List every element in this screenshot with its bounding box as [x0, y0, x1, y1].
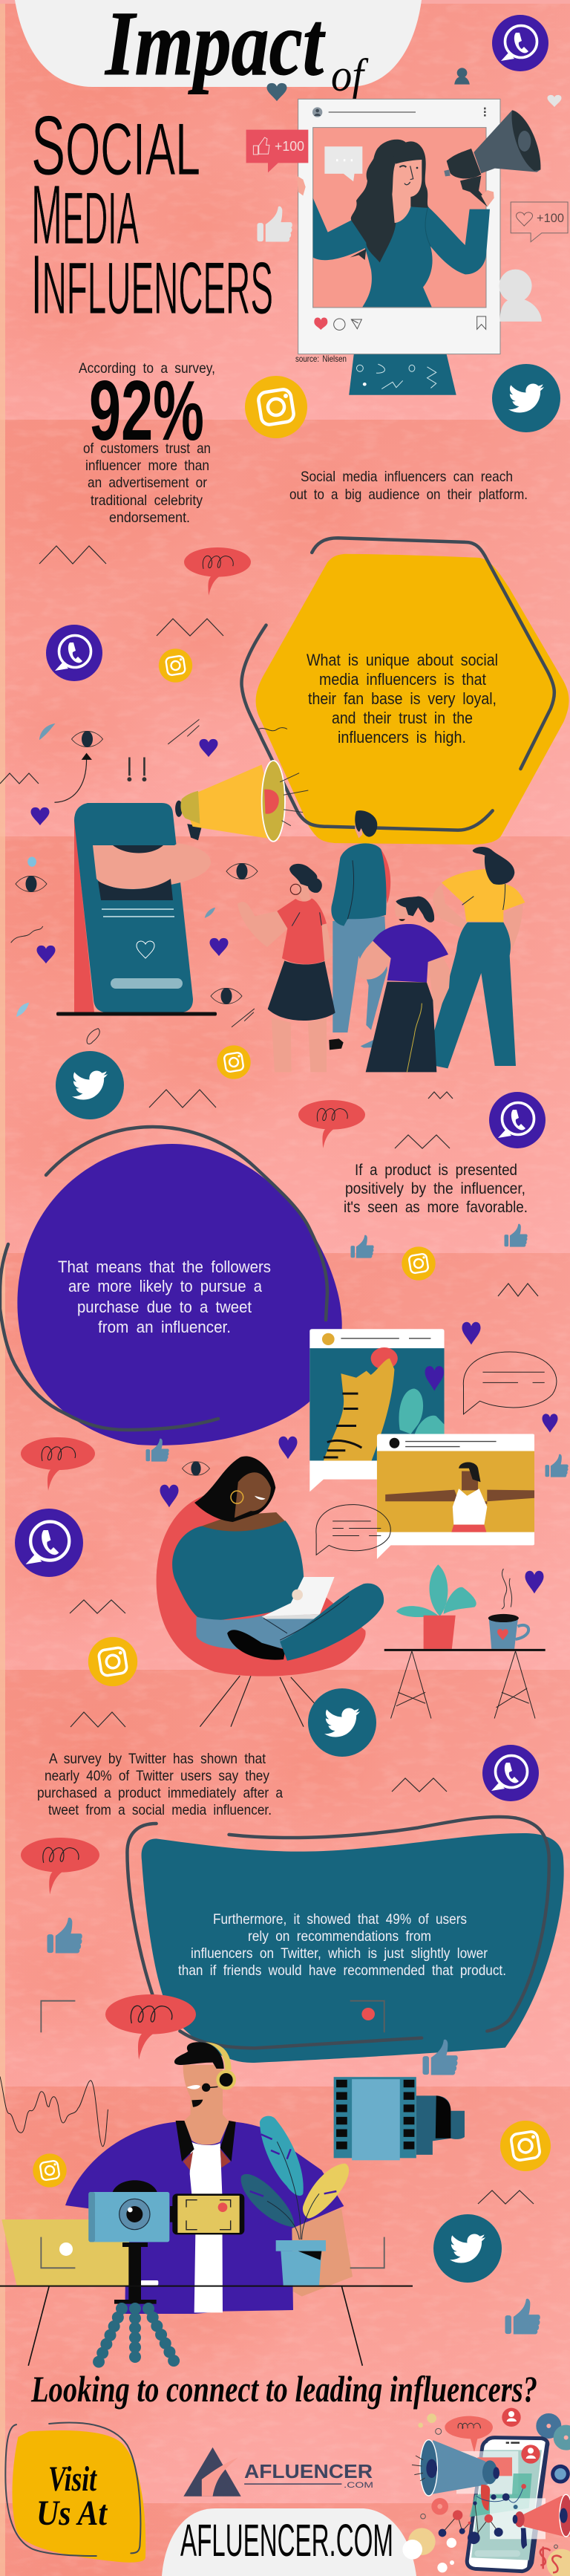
text: audience reach [289, 469, 528, 503]
illustration: creator with camera at desk [0, 2042, 413, 2314]
illustration: social post cards [309, 1329, 534, 1559]
decorative zigzags [0, 546, 538, 2204]
stat: 92% of customers: of customers trust an [83, 440, 211, 457]
viewfinder corners and record dot [41, 2001, 384, 2268]
panel: yellow hexagon: What is unique about social [307, 651, 498, 669]
icon: pale heart [548, 95, 561, 107]
illustration: megaphones and phone cluster [402, 2408, 570, 2576]
panel: teal blob with recommendations text: than if friends would have recommended that product. [178, 1963, 506, 1979]
source note: source: Nielsen [295, 354, 347, 364]
icon: dark heart [267, 83, 286, 101]
logo: Afluencer: AFLUENCER [244, 2460, 373, 2482]
stat: 92% of customers: traditional celebrity [91, 492, 203, 509]
title: Social Media Influencers: SOCIAL [31, 99, 200, 192]
icons: twitter badges [56, 364, 560, 2283]
heading blob: top white shape [15, 0, 422, 87]
text: Twitter survey: purchased a product immediately after a [37, 1785, 283, 1801]
panel: purple blob with followers text: are more likely to pursue a [68, 1277, 263, 1295]
panel: teal blob with recommendations text [127, 1817, 564, 2063]
panel: yellow hexagon: their fan base is very loyal, [308, 689, 497, 708]
text: audience reach: out to a big audience on their platform. [289, 487, 528, 503]
stat: 92% of customers: According to a survey, [79, 360, 215, 377]
waveform [0, 2076, 108, 2147]
text: positive presentation: If a product is presented [355, 1162, 517, 1179]
icons: eyes [16, 731, 258, 1476]
icon: thumb beside teal blob [423, 2040, 458, 2075]
skirt under instagram frame [349, 349, 456, 395]
panel: visit us at: Visit [48, 2459, 97, 2499]
stat: 92% of customers: influencer more than [85, 458, 209, 474]
panel: visit us at: Us At [36, 2494, 108, 2533]
illustration: group of people [238, 810, 525, 1072]
outline speech bubbles [316, 1352, 557, 1555]
title: Social Media Influencers [31, 99, 273, 331]
icons: thumbs up [48, 1224, 569, 2335]
panel: purple blob with followers text: That means that the followers [58, 1258, 271, 1276]
panel: purple blob with followers text: from an influencer. [98, 1318, 231, 1336]
icons: instagram badges [33, 376, 551, 2188]
icons: whatsapp badges [15, 15, 548, 1801]
illustration: phone with hand and megaphone [56, 761, 308, 1016]
footer: white blob with url [162, 2508, 416, 2576]
text: positive presentation: positively by the influencer, [345, 1180, 525, 1197]
chat bubble [324, 146, 362, 181]
panel: yellow hexagon [242, 538, 569, 845]
icon: small dark person [454, 68, 470, 85]
panel: purple blob with followers text [0, 1127, 342, 1445]
text: positive presentation: it's seen as more favorable. [344, 1199, 528, 1216]
panel: yellow hexagon: influencers is high. [338, 728, 466, 747]
text: audience reach: Social media influencers can reach [301, 469, 513, 485]
stat: 92% of customers: endorsement. [109, 510, 190, 526]
decor marks: slashes, exclamations, arrow and leaves [27, 719, 287, 867]
text: Twitter survey: tweet from a social media influencer. [48, 1802, 272, 1818]
icons: purple hearts [31, 739, 558, 1593]
icon: twitter badge over chair [308, 1688, 376, 1757]
like counter bubble [246, 130, 308, 172]
infographic canvas: INFLUENCERS [31, 238, 273, 331]
instagram post frame with influencer [297, 99, 540, 354]
text: Twitter survey [37, 1751, 283, 1818]
like counter bubble: +100 [275, 139, 304, 154]
icon: pale thumb [257, 206, 292, 242]
illustration: woman with laptop in chair [157, 1457, 384, 1727]
stat: 92% of customers: 92% [89, 364, 204, 458]
stat: 92% of customers [79, 360, 215, 526]
logo: Afluencer [183, 2447, 373, 2497]
icon: film strip [334, 2077, 465, 2160]
panel: teal blob with recommendations text: Furthermore, it showed that 49% of users [213, 1912, 467, 1928]
text: Twitter survey: A survey by Twitter has shown that [49, 1751, 266, 1767]
panel: yellow hexagon: media influencers is that [319, 670, 486, 689]
panel: teal blob with recommendations text: influencers on Twitter, which is just slightly lower [191, 1946, 488, 1962]
panel: teal blob with recommendations text: rely on recommendations from [248, 1929, 431, 1945]
decor marks near people [11, 908, 255, 1044]
illustration: side table with plant and mug [384, 1564, 546, 1719]
icon: grey person [499, 270, 542, 322]
footer: white blob with url: AFLUENCER.COM [180, 2515, 393, 2566]
desk legs [28, 2286, 362, 2366]
panel: purple blob with followers text: purchase due to a tweet [77, 1298, 252, 1316]
tripod beads [98, 2309, 175, 2364]
heart counter outline bubble [511, 202, 568, 242]
icon: red speech bubble on teal blob [105, 1994, 196, 2060]
stat: 92% of customers: an advertisement or [88, 475, 207, 491]
icons: red speech bubbles [21, 547, 365, 1894]
title: Social Media Influencers: MEDIA [31, 168, 139, 261]
text: positive presentation [344, 1162, 528, 1216]
logo: Afluencer: .COM [344, 2481, 373, 2490]
panel: yellow hexagon: and their trust in the [332, 709, 473, 727]
title: of: of [331, 51, 369, 101]
panel: visit us at [5, 2422, 145, 2563]
heart counter outline bubble: +100 [537, 211, 564, 225]
text: Twitter survey: nearly 40% of Twitter users say they [45, 1768, 269, 1784]
